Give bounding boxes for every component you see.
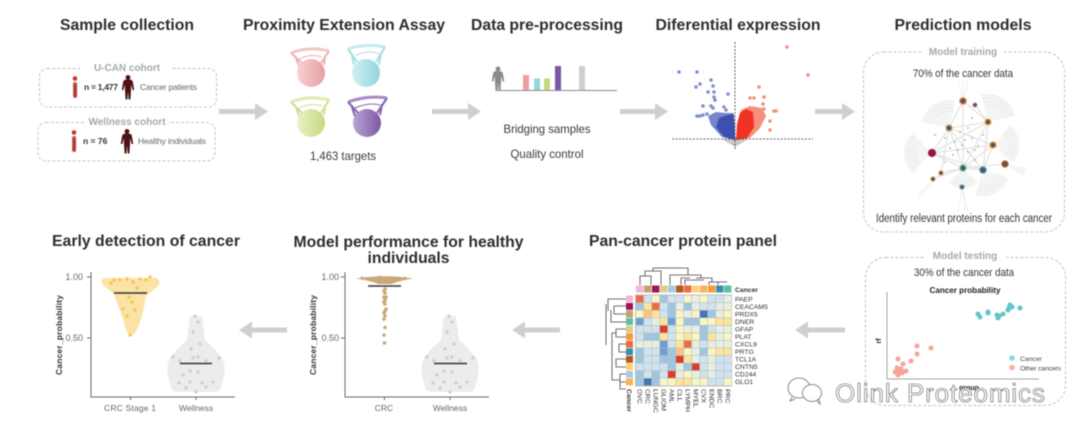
title: early detection: Early detection of cancer	[52, 233, 240, 250]
title: data pre-processing: Data pre-processing	[471, 17, 623, 34]
heatmap row labels: CXCL9	[735, 342, 757, 348]
title: differential expression: Diferential expression	[656, 17, 820, 34]
icon: purple assay probe	[348, 97, 387, 137]
heatmap row labels: CEACAM5	[735, 304, 768, 311]
arrow	[219, 103, 268, 120]
heatmap row labels: CNTN5	[735, 364, 758, 371]
column annotation	[636, 286, 731, 292]
panel: Wellness cohort	[38, 115, 215, 161]
panel: Wellness cohort: n = 76	[83, 136, 108, 146]
heatmap row labels: Cancer	[735, 287, 758, 294]
panel: U-CAN cohort: Cancer patients	[140, 82, 197, 92]
chart: model performance violin	[308, 272, 489, 413]
heatmap column labels: MYEL	[692, 389, 698, 408]
title: proximity extension assay: Proximity Extension Assay	[243, 17, 445, 34]
heatmap column labels: CRC	[644, 389, 650, 404]
heatmap column labels: PRC	[724, 389, 730, 403]
heatmap row labels: CD244	[735, 372, 756, 378]
heatmap row labels: PRTG	[735, 349, 754, 356]
heatmap column labels: AML	[668, 389, 674, 403]
chart: volcano plot	[672, 42, 813, 150]
panel: U-CAN cohort	[40, 62, 216, 107]
panel: model training: Model training	[929, 47, 997, 58]
chart: scatter plot	[876, 292, 1062, 392]
heatmap column labels: LYMPH	[684, 389, 690, 412]
chart: scatter plot: group	[959, 385, 979, 392]
watermark text: Olink Proteomics	[835, 378, 1045, 408]
chart: scatter plot: Cancer	[1020, 356, 1043, 363]
chart: scatter plot: rf	[876, 338, 883, 344]
top dendrogram	[640, 268, 727, 285]
watermark icon: chat bubbles	[788, 378, 822, 404]
icon: green assay probe	[291, 98, 329, 137]
chart: early detection violin	[54, 272, 235, 413]
chart: model performance violin: 0.50	[321, 333, 339, 343]
text: 70 percent: 70% of the cancer data	[913, 68, 1014, 80]
text: bridging samples: Bridging samples	[504, 122, 590, 136]
chart: early detection violin: 0.50	[65, 333, 83, 343]
panel: model testing	[866, 248, 1066, 406]
heatmap row labels: PRDX5	[735, 312, 758, 318]
chart: early detection violin: CRC Stage 1	[104, 403, 156, 413]
chart: model performance violin: Wellness	[433, 403, 467, 413]
network graph	[905, 80, 1026, 212]
heatmap column labels: LUNGC	[652, 389, 658, 413]
text: targets: 1,463 targets	[310, 149, 376, 163]
arrow	[815, 103, 855, 120]
title: sample collection: Sample collection	[60, 17, 194, 34]
chart: model performance violin: 1.00	[321, 272, 339, 282]
chart: model performance violin: Cancer_probability	[308, 295, 318, 375]
heatmap column labels: BRC	[716, 389, 722, 403]
text: 30 percent: 30% of the cancer data	[914, 267, 1015, 279]
chart: early detection violin: Cancer_probability	[54, 295, 64, 375]
chart: early detection violin: 1.00	[65, 272, 83, 282]
heatmap cells	[635, 294, 732, 386]
arrow	[795, 322, 845, 338]
left dendrogram	[606, 299, 626, 389]
panel: U-CAN cohort: U-CAN cohort	[94, 63, 161, 74]
panel: model training	[864, 44, 1064, 232]
title: model performance second line: individuals	[368, 250, 450, 267]
heatmap row labels: DNER	[735, 319, 754, 326]
icon: pink assay probe	[291, 49, 329, 87]
chart: early detection violin: Wellness	[179, 403, 213, 413]
heatmap column labels: Cancer	[625, 389, 632, 412]
heatmap column labels: GLIOM	[660, 389, 666, 411]
arrow	[239, 322, 287, 338]
panel: U-CAN cohort: n = 1,477	[84, 82, 118, 92]
heatmap column labels: CLL	[676, 389, 682, 402]
arrow	[512, 322, 560, 338]
chart: model performance violin: CRC	[375, 403, 393, 413]
title: pan-cancer protein panel: Pan-cancer protein panel	[589, 233, 777, 250]
chart: bridging bars	[492, 66, 617, 91]
title: model performance: Model performance for healthy	[294, 234, 524, 251]
heatmap row labels: GFAP	[735, 326, 754, 334]
panel: model testing: Model testing	[933, 251, 997, 262]
heatmap row labels: PAEP	[735, 296, 753, 304]
text: quality control: Quality control	[510, 147, 584, 161]
heatmap column labels	[625, 389, 730, 413]
arrow	[620, 103, 668, 120]
heatmap column labels: CVX	[700, 389, 706, 403]
chart: heatmap	[606, 268, 768, 413]
heatmap column labels: ENDC	[708, 389, 714, 408]
heatmap row labels: PLAT	[735, 334, 752, 341]
panel: Wellness cohort: Wellness cohort	[88, 117, 166, 128]
text: identify proteins: Identify relevant proteins for each cancer	[876, 213, 1052, 225]
title: prediction models: Prediction models	[894, 17, 1032, 34]
heatmap row labels	[735, 287, 768, 386]
chart: scatter plot: Other cancers	[1020, 366, 1062, 372]
heatmap row labels: GLO1	[735, 379, 753, 386]
arrow	[432, 103, 481, 120]
text: scatter title: Cancer probability	[930, 285, 1001, 295]
icon: cyan assay probe	[348, 45, 385, 87]
heatmap row labels: TCL1A	[735, 356, 757, 364]
panel: Wellness cohort: Healthy individuals	[138, 136, 206, 146]
row annotation	[626, 296, 633, 385]
heatmap column labels: OVC	[636, 389, 642, 404]
